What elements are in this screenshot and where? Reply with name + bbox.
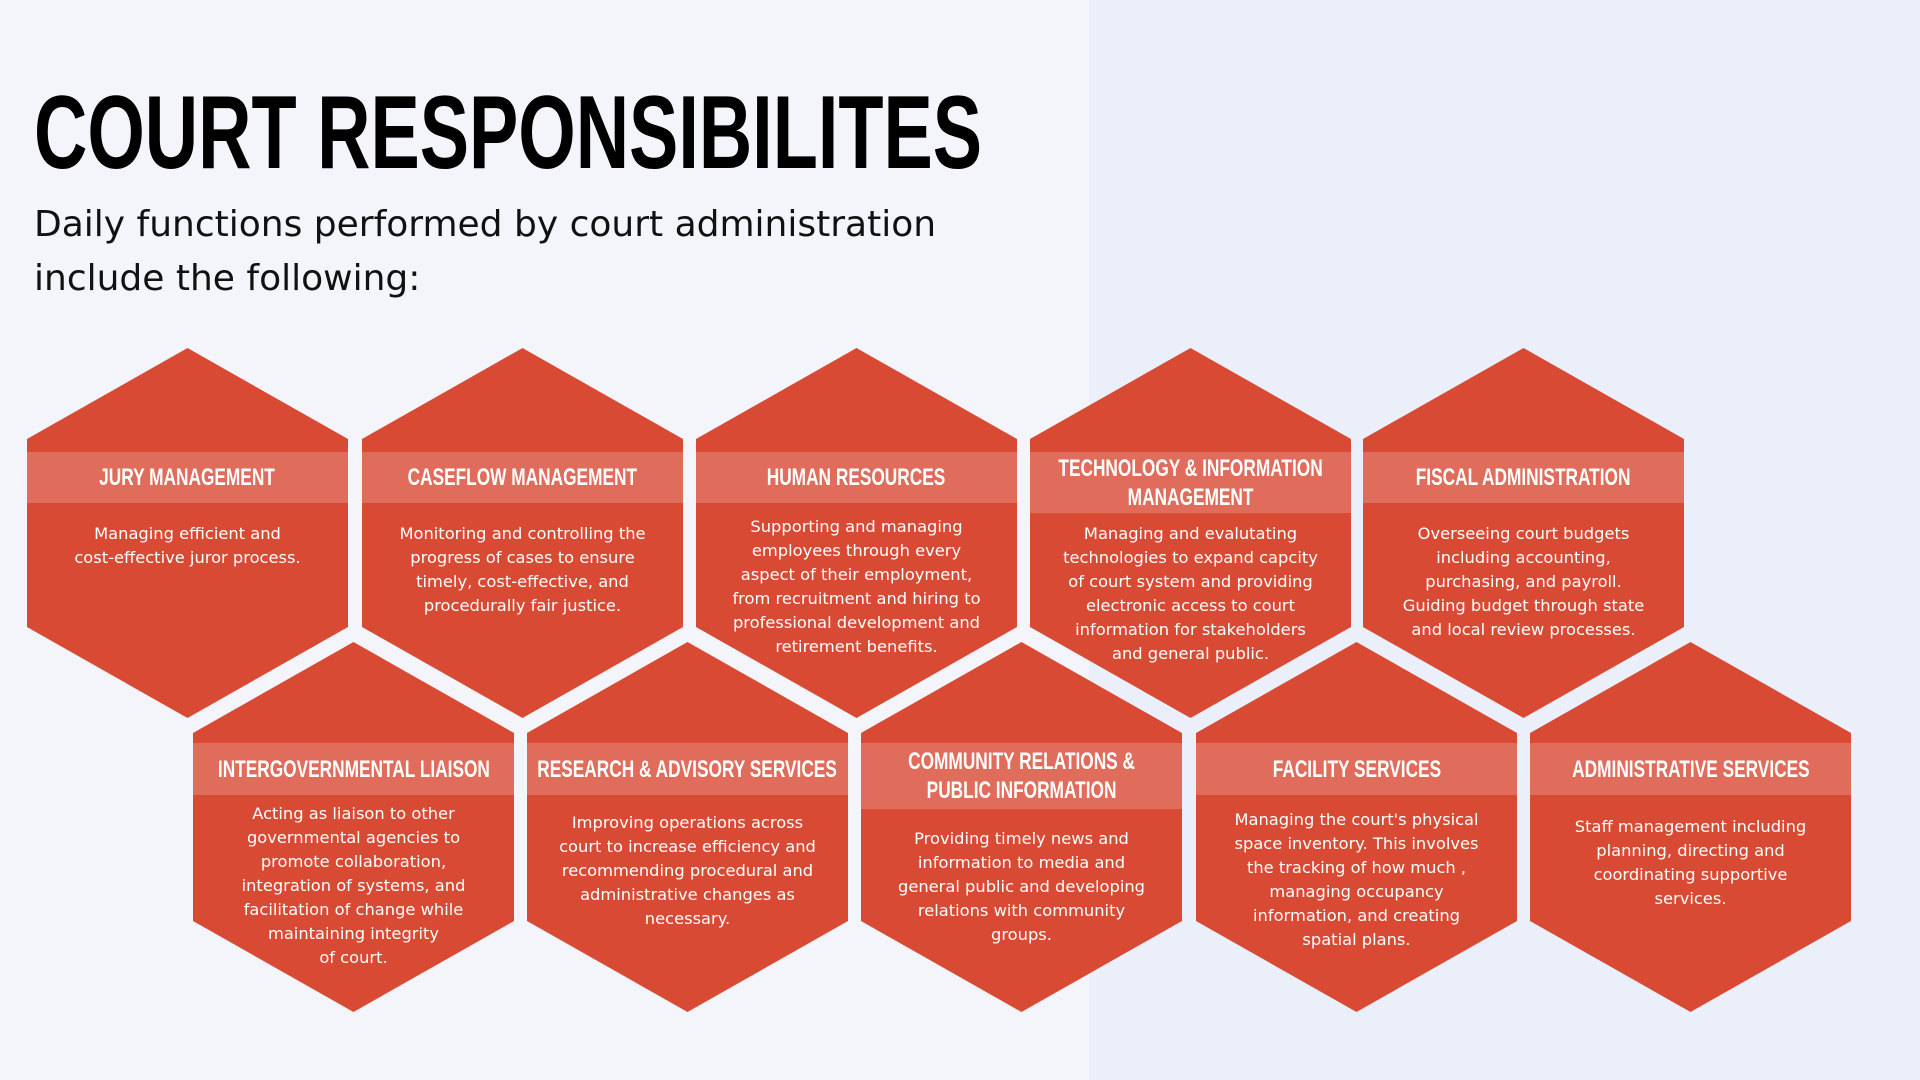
heading: ADMINISTRATIVE SERVICES xyxy=(1572,756,1809,782)
heading: CASEFLOW MANAGEMENT xyxy=(408,464,637,491)
body: Managing and evalutating technologies to expand capcity of court system and providing electronic access to court information for stakeholders and general public. xyxy=(1063,524,1318,663)
body: Managing the court's physical space inventory. This involves the tracking of how much , managing occupancy information, and creating spatial plans. xyxy=(1234,810,1479,949)
hex: administrative services xyxy=(1530,642,1851,1012)
body: Providing timely news and information to media and general public and developing relations with community groups. xyxy=(898,829,1145,944)
hex: community relations & public information xyxy=(861,642,1182,1012)
hex: facility services xyxy=(1196,642,1517,1012)
subtitle: Daily functions performed by court administration xyxy=(34,204,936,245)
heading: PUBLIC INFORMATION xyxy=(927,777,1116,804)
hex: caseflow management xyxy=(362,348,683,718)
body: Improving operations across court to increase efficiency and recommending procedural and administrative changes as necessary. xyxy=(559,813,816,928)
body: Monitoring and controlling the progress of cases to ensure timely, cost-effective, and procedurally fair justice. xyxy=(399,524,646,615)
body: cost-effective juror process. xyxy=(74,548,301,567)
body: Acting as liaison to other governmental agencies to promote collaboration, integration of systems, and facilitation of change while maintaining integrity xyxy=(242,804,465,943)
subtitle: include the following: xyxy=(34,258,420,299)
heading: RESEARCH & ADVISORY SERVICES xyxy=(538,756,837,782)
body: of court. xyxy=(319,948,388,967)
heading: TECHNOLOGY & INFORMATION xyxy=(1058,454,1323,482)
heading: FISCAL ADMINISTRATION xyxy=(1416,464,1631,491)
hex: research & advisory services xyxy=(527,642,848,1012)
body: Supporting and managing employees through every aspect of their employment, from recruitment and hiring to professional development and retirement benefits. xyxy=(732,517,981,656)
heading: HUMAN RESOURCES xyxy=(767,464,946,491)
body: Overseeing court budgets including accounting, purchasing, and payroll. Guiding budget through state and local review processes. xyxy=(1403,524,1644,639)
hex: jury management xyxy=(27,348,348,718)
heading: JURY MANAGEMENT xyxy=(100,464,275,491)
heading: INTERGOVERNMENTAL LIAISON xyxy=(218,756,490,782)
heading xyxy=(1058,454,1323,510)
hex: intergovernmental liaison xyxy=(193,642,514,1012)
body xyxy=(74,524,301,567)
heading: COMMUNITY RELATIONS & xyxy=(908,748,1135,775)
body: Managing efficient and xyxy=(94,524,281,543)
heading: FACILITY SERVICES xyxy=(1272,756,1441,782)
hex: technology & information management xyxy=(1030,348,1351,718)
heading xyxy=(908,748,1135,804)
heading: MANAGEMENT xyxy=(1128,484,1253,510)
body: Staff management including planning, directing and coordinating supportive services. xyxy=(1575,817,1806,908)
hex: fiscal administration xyxy=(1363,348,1684,718)
subtitle xyxy=(34,204,936,299)
hex: human resources xyxy=(696,348,1017,718)
